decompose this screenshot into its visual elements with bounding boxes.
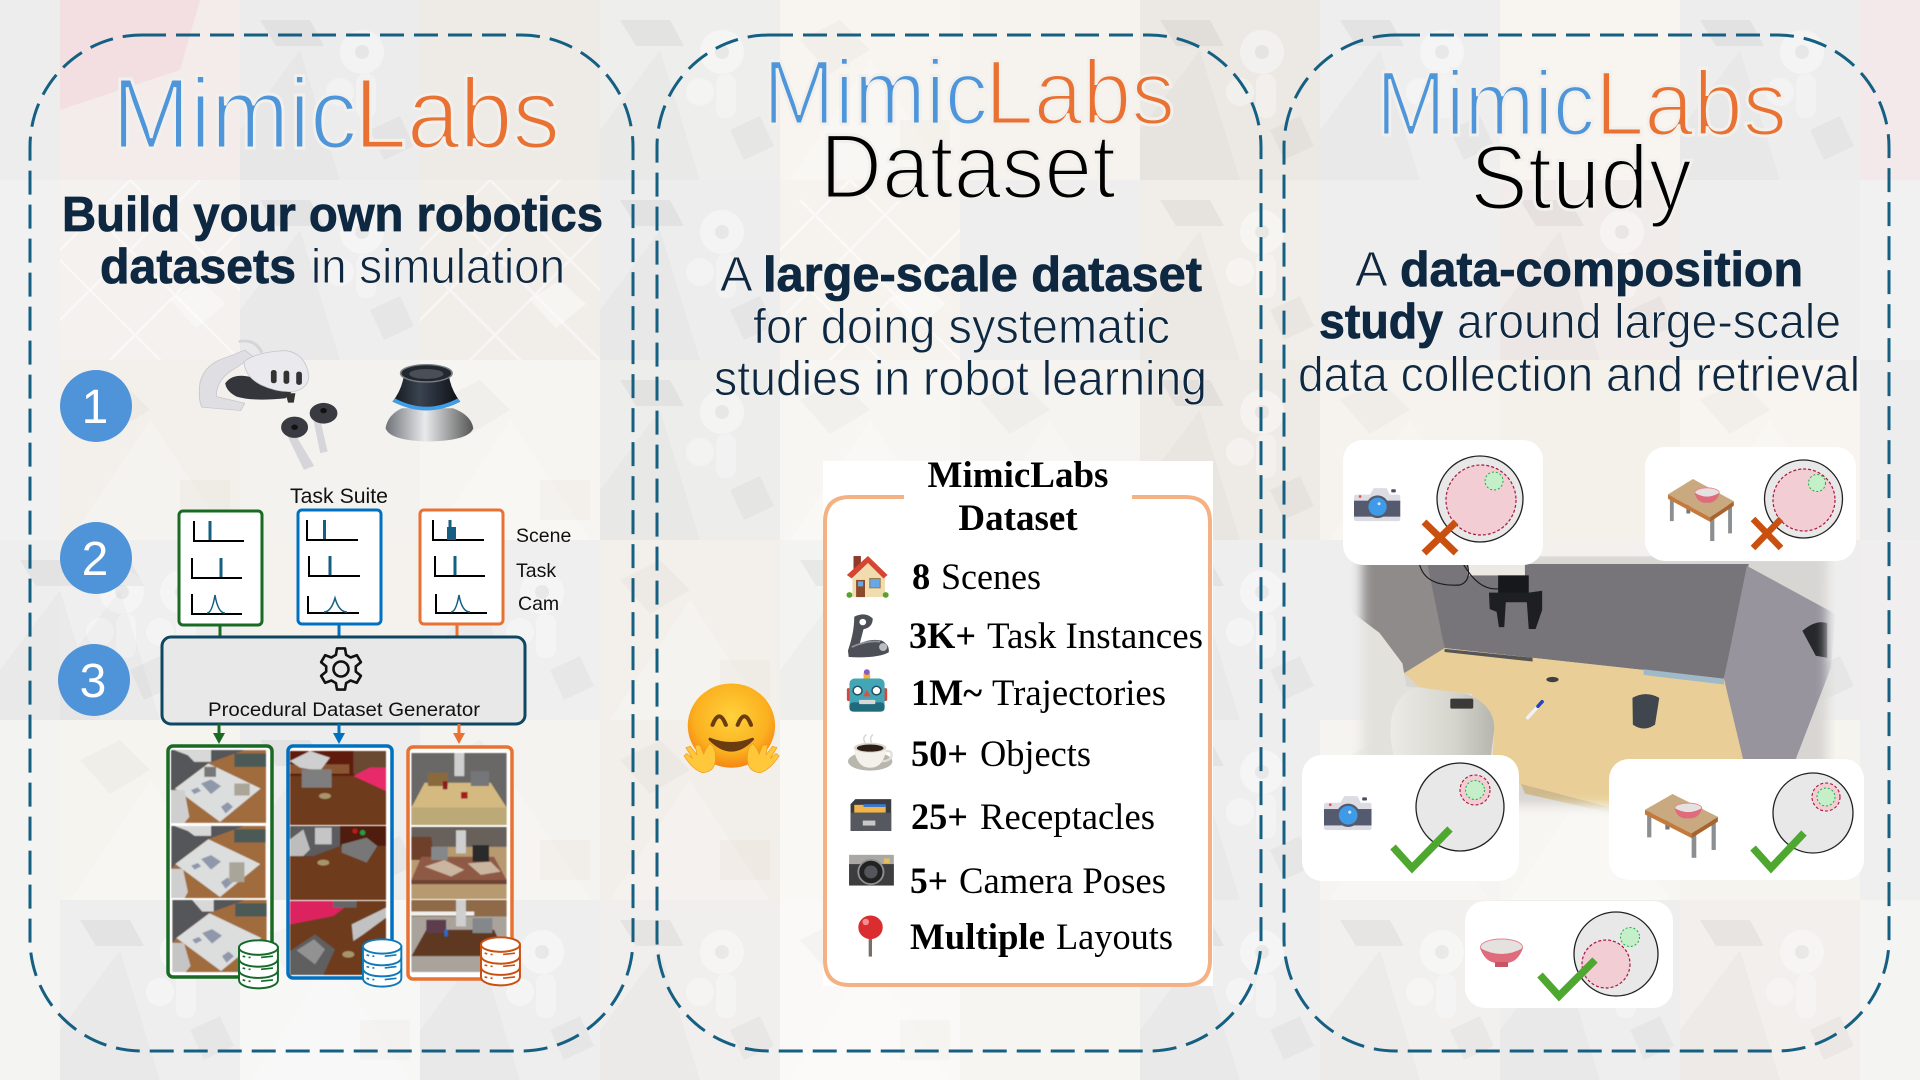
heading: build your own robotics datasets: in simulation — [311, 240, 565, 294]
icon: blue database — [363, 939, 401, 987]
step 3 badge — [58, 644, 130, 716]
card: table succeeds — [1609, 759, 1864, 880]
card: camera succeeds — [1302, 755, 1519, 881]
label: Task Suite: Task Suite — [290, 485, 388, 508]
icon: orange database — [481, 937, 520, 985]
panel: dataset — [657, 35, 1261, 1051]
stat: objects: 50+ — [911, 733, 968, 774]
step 3 badge: 3 — [80, 655, 106, 708]
subtitle: data composition study: around large-scale — [1457, 295, 1841, 349]
check mark — [1540, 960, 1595, 996]
subtitle: data composition study: data-composition — [1400, 243, 1803, 297]
title: MimicLabs Study: Mimic — [1376, 53, 1595, 155]
icon: hugging face emoji — [684, 683, 779, 773]
labels: scene task cam: Task — [516, 560, 556, 582]
box: procedural dataset generator — [162, 637, 525, 724]
card: table fails — [1645, 447, 1856, 561]
subtitle: data composition study — [1298, 243, 1860, 402]
distribution diagram — [1416, 763, 1504, 851]
card title: MimicLabs — [928, 455, 1108, 496]
image strip: blue scenes — [288, 746, 401, 987]
icon: camera — [1354, 488, 1400, 521]
title: MimicLabs Study — [1376, 53, 1787, 229]
icon: camera with flash — [849, 855, 894, 886]
stat: scenes: 8 — [912, 556, 930, 597]
icon: coffee cup — [848, 735, 892, 771]
stat: receptacles: Receptacles — [980, 796, 1155, 837]
title: MimicLabs — [112, 58, 560, 170]
dashed panel border — [657, 35, 1261, 1051]
heading: build your own robotics datasets — [62, 188, 603, 294]
icon: bowl — [1480, 939, 1523, 967]
card: bowl succeeds — [1465, 901, 1673, 1008]
stat: trajectories — [911, 672, 1166, 713]
arrow: orange — [453, 724, 465, 744]
icon: camera — [1324, 796, 1372, 830]
labels: scene task cam: Scene — [516, 525, 571, 547]
icon: gear — [321, 648, 361, 690]
title: MimicLabs: Labs — [354, 58, 560, 170]
arrow: blue — [333, 724, 345, 744]
panel: study — [1284, 35, 1889, 1051]
icon: card file box — [851, 799, 891, 831]
card title: Dataset — [958, 498, 1078, 539]
heading: build your own robotics datasets: Build your own robotics — [62, 188, 603, 242]
icon: robot — [847, 669, 887, 712]
step 1 badge: 1 — [82, 381, 108, 434]
distribution diagram — [1437, 456, 1523, 542]
task card: green distributions — [179, 511, 262, 625]
stat: camera poses: Camera Poses — [959, 860, 1166, 901]
subtitle: large-scale dataset: studies in robot learning — [714, 352, 1207, 406]
distribution diagram — [1574, 912, 1658, 996]
card: camera fails — [1343, 440, 1543, 565]
subtitle: data composition study: study — [1319, 295, 1443, 349]
connector stems — [220, 623, 457, 638]
task card: blue distributions — [298, 510, 381, 624]
stat: task instances: Task Instances — [987, 615, 1203, 656]
image strip: orange scenes — [408, 747, 520, 985]
title: MimicLabs Dataset: Dataset — [820, 116, 1116, 218]
stat: trajectories: Trajectories — [992, 672, 1166, 713]
subtitle: large-scale dataset — [714, 248, 1207, 406]
stat: objects — [911, 733, 1091, 774]
subtitle: large-scale dataset: for doing systematic — [753, 300, 1170, 354]
subtitle: large-scale dataset: A — [720, 248, 753, 302]
step 2 badge — [60, 522, 132, 594]
icon: house — [846, 556, 889, 598]
icon: green database — [239, 940, 278, 988]
step 1 badge — [60, 370, 132, 442]
heading: build your own robotics datasets: datasets — [100, 240, 296, 294]
title: MimicLabs Study: Labs — [1595, 53, 1787, 155]
box: procedural dataset generator: Procedural Dataset Generator — [208, 700, 481, 721]
icon: round pushpin — [858, 916, 883, 957]
stat: trajectories: 1M~ — [911, 672, 982, 713]
icon: VR headset and controllers — [199, 341, 337, 470]
labels: scene task cam — [516, 525, 571, 615]
icon: table with bowl — [1668, 479, 1734, 541]
stat: objects: Objects — [980, 733, 1091, 774]
photo: robot workspace — [1349, 556, 1835, 817]
stat: scenes: Scenes — [941, 556, 1041, 597]
icon: mechanical arm — [848, 614, 889, 657]
check mark — [1393, 829, 1450, 868]
cross mark — [1424, 522, 1456, 553]
card: MimicLabs Dataset stats — [823, 455, 1213, 986]
check mark — [1753, 833, 1804, 868]
title: MimicLabs Dataset: Labs — [985, 42, 1175, 144]
stat: layouts: Layouts — [1056, 916, 1173, 957]
subtitle: large-scale dataset: large-scale dataset — [763, 248, 1202, 302]
task card: orange distributions — [420, 510, 503, 624]
stat: layouts — [910, 916, 1173, 957]
stat: receptacles: 25+ — [911, 796, 968, 837]
distribution diagram — [1764, 460, 1842, 538]
arrow: green — [213, 724, 225, 744]
dashed panel border — [30, 35, 633, 1051]
stat: layouts: Multiple — [910, 916, 1045, 957]
title: MimicLabs Dataset: Mimic — [763, 42, 988, 144]
icon: table with bowl — [1645, 794, 1718, 858]
distribution diagram — [1773, 773, 1853, 853]
labels: scene task cam: Cam — [518, 593, 559, 615]
icon: 3D space mouse — [386, 365, 473, 442]
cross mark — [1753, 519, 1781, 548]
stat: camera poses: 5+ — [910, 860, 948, 901]
title: MimicLabs: Mimic — [112, 58, 357, 170]
panel: build your own datasets — [30, 35, 633, 1051]
step 2 badge: 2 — [82, 533, 108, 586]
stat: task instances: 3K+ — [909, 615, 976, 656]
card title — [928, 455, 1108, 539]
subtitle: data composition study: data collection and retrieval — [1298, 348, 1860, 402]
title: MimicLabs Study: Study — [1470, 127, 1692, 229]
image strip: green scenes — [168, 746, 278, 988]
subtitle: data composition study: A — [1355, 243, 1388, 297]
title: MimicLabs Dataset — [763, 42, 1175, 218]
dashed panel border — [1284, 35, 1889, 1051]
